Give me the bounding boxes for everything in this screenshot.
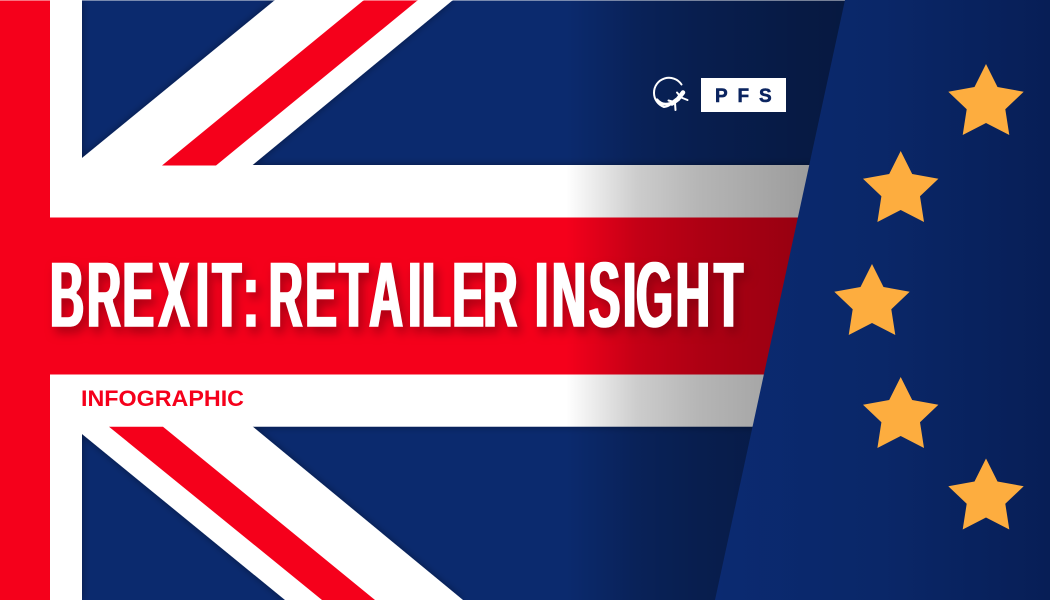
icon: star 3 <box>834 264 910 335</box>
subtitle: INFOGRAPHIC <box>81 386 244 411</box>
logo: PFS <box>654 78 786 112</box>
stars <box>834 64 1024 530</box>
title: INSIGHT <box>535 242 743 347</box>
icon: star 4 <box>863 377 938 448</box>
EU blue field <box>715 0 1050 600</box>
logo box <box>701 78 786 112</box>
title: RETAILER <box>269 242 517 347</box>
top edge highlight <box>0 0 860 1</box>
icon: star 1 <box>948 64 1024 135</box>
icon: star 5 <box>948 458 1024 530</box>
logo letters: P <box>715 86 728 107</box>
logo letters: F <box>738 86 749 107</box>
title: BREXIT: <box>50 242 259 347</box>
icon: star 2 <box>863 151 938 222</box>
flag white cross and diagonals <box>50 0 860 600</box>
logo letters: S <box>759 86 772 107</box>
title <box>50 242 743 347</box>
panel: EU flag <box>715 0 1050 600</box>
flag shadow gradient <box>566 0 860 600</box>
icon: lizard ring <box>654 78 688 110</box>
